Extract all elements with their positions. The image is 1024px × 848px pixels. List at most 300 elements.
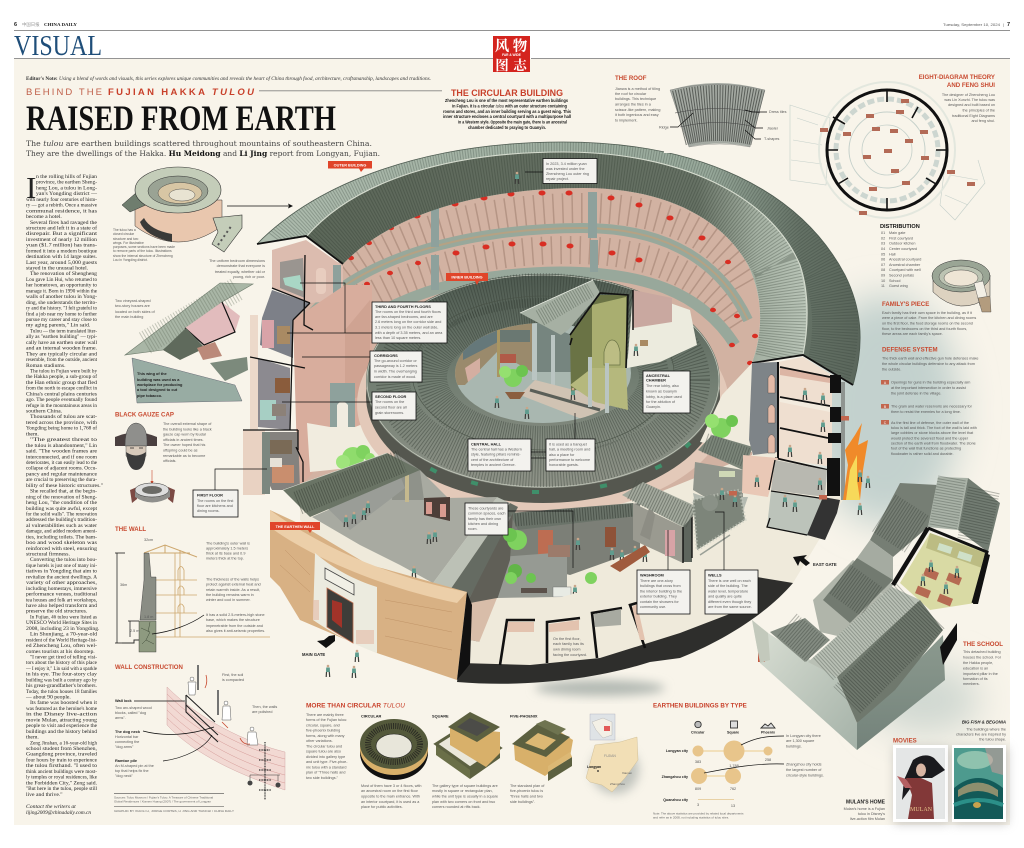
article body: heng Lou, "the condition of the bbox=[26, 499, 97, 506]
note: uniform bedrooms bbox=[209, 259, 266, 279]
text: wall notes: It has a solid 2.5-meters-high stone bbox=[206, 613, 265, 617]
article body: cally have an earthen outer wall bbox=[26, 340, 97, 346]
text: black gauze cap bbox=[163, 422, 212, 463]
callout: courtyards bbox=[465, 503, 508, 535]
illustration: wall construction bbox=[167, 665, 285, 800]
chart: earthen buildings by type: 762 bbox=[730, 787, 736, 791]
text: forms intro bbox=[306, 713, 348, 780]
poster: big fish and begonia bbox=[952, 745, 1008, 824]
callout: wells: different even though they bbox=[708, 600, 751, 604]
callout: assembly hall: It is used as a banquet bbox=[549, 442, 588, 446]
article body: for the solid walls". The renovation bbox=[26, 510, 97, 518]
text: wall notes: protect against external heat and bbox=[206, 582, 261, 586]
upper gallery walls bbox=[293, 188, 760, 500]
credits: GRAPHIC BY XIAOLI LI, JORGE CORTES, LI JING AND TIANCHI / CHINA DAILY bbox=[114, 809, 234, 813]
callout: wells: and quality are quite bbox=[708, 594, 742, 598]
callout: corridors bbox=[370, 351, 422, 382]
article body: building was built a century ago by bbox=[26, 677, 97, 683]
main title: RAISED FROM EARTH bbox=[26, 98, 336, 138]
labels: roof parts bbox=[659, 110, 787, 141]
callout: central hall: cent of the architecture of bbox=[471, 458, 514, 462]
callout: central hall: temples in ancient Greece. bbox=[471, 463, 516, 467]
person on roof with callout: repair project. bbox=[546, 177, 569, 181]
callout: courtyards: common spaces, each bbox=[468, 512, 506, 516]
text: family's piece: floor, to the bedrooms on the third and fourth floors, bbox=[882, 327, 967, 331]
callout: corridors: The go-around corridor or bbox=[374, 359, 417, 363]
callout: ancestral chamber: lobby, is a place used bbox=[646, 395, 682, 399]
notes: construction steps: is compacted bbox=[222, 678, 244, 682]
subtitle: They are the dwellings of the Hakka. Hu Meidong and Li Jing report from Longyan, Fujian. bbox=[26, 149, 380, 158]
left tower rooms bbox=[243, 240, 384, 495]
text: square: corners rounded at rifts back. bbox=[432, 805, 481, 809]
list: distribution: Second portals bbox=[889, 274, 914, 278]
article body: and an internal wooden frame. bbox=[26, 345, 98, 352]
article body: tique hotels is just one of many ini- bbox=[26, 562, 97, 569]
defense item c: C bbox=[884, 421, 887, 425]
callout: washroom: WASHROOM bbox=[640, 572, 664, 578]
list: distribution: Ancestral chamber bbox=[889, 263, 921, 267]
callout: third and fourth floors: 2.6 meters long on the corridor side and bbox=[375, 320, 441, 324]
text: circular building intro: rooms and stores, and an inner building serving as a guest wing. This bbox=[443, 109, 572, 114]
form: five-phoenix: five-phoenix tulou is bbox=[510, 789, 543, 793]
list: distribution: 08 bbox=[881, 268, 885, 272]
article body: ally as "earthen building" — typi- bbox=[26, 334, 97, 340]
chart: earthen buildings by type: circular-style buildings. bbox=[786, 774, 824, 778]
list: distribution: 02 bbox=[881, 236, 885, 240]
article body: said. "The wooden frames are bbox=[26, 448, 97, 455]
defense item c: section of the earth wall from floodwater. The stone bbox=[891, 442, 976, 446]
defense item c: large cobbles or stone blocks above the level that bbox=[891, 431, 974, 435]
article body: structural firmness. bbox=[26, 550, 70, 558]
arrow: cap to ring bbox=[150, 470, 154, 485]
subtitle: The tulou are earthen buildings scattered throughout mountains of southeastern China. bbox=[26, 139, 372, 148]
note: wing workplace bbox=[136, 371, 183, 398]
chart: earthen buildings by type: buildings. bbox=[786, 744, 802, 748]
form: circular: an interior courtyard, it is used as a bbox=[361, 800, 420, 804]
callout: central hall: style, featuring pillars reminis- bbox=[471, 452, 521, 456]
callout: courtyards: room. bbox=[468, 527, 478, 531]
article body: movie Mulan, attracting young bbox=[26, 717, 97, 723]
text: black gauze cap: The overall external shape of bbox=[163, 422, 212, 426]
chart: earthen buildings by type: Note: The above statistics are provided by related local departments bbox=[653, 812, 744, 816]
text: forms intro: nix tulou with a standard bbox=[306, 766, 346, 770]
article body: find a job near my home to further bbox=[26, 310, 97, 317]
callout: washroom bbox=[637, 570, 690, 614]
article body: the Han ethnic group that fled bbox=[26, 379, 97, 386]
inner courtyard bbox=[455, 323, 631, 423]
article body: the tulou is abandonment," Lin bbox=[26, 443, 97, 449]
labels: roof parts: Jiaolei bbox=[767, 126, 778, 130]
kicker bbox=[26, 87, 442, 98]
callout: wells: There is one well on each bbox=[708, 579, 751, 583]
heading: movies: MOVIES bbox=[893, 738, 917, 744]
labels: construction parts: top that helps fix the bbox=[115, 769, 149, 773]
defense item a: at the important intersection in order to assist bbox=[891, 386, 967, 390]
header rule bbox=[14, 57, 1010, 60]
text: mulan's home: tulou in Disney's bbox=[858, 812, 885, 816]
list: distribution: Outdoor kitchen bbox=[889, 242, 915, 246]
text: square bbox=[432, 784, 498, 809]
defense item c bbox=[881, 420, 977, 456]
article body: n the rolling hills of Fujian bbox=[36, 173, 97, 180]
chart: earthen buildings by type: Quanzhou city bbox=[663, 798, 688, 802]
article body: Lou gave Lin Hui, who returned to bbox=[26, 277, 97, 283]
chart: earthen buildings by type bbox=[653, 721, 824, 820]
text: wall notes: impenetrable from the outside and bbox=[206, 624, 263, 628]
page header: 6 bbox=[14, 22, 17, 28]
list: distribution: Courtyard with well bbox=[889, 268, 921, 272]
list: distribution: School bbox=[889, 279, 901, 283]
diagram: wall section bbox=[115, 538, 270, 652]
chart: earthen buildings by type: Zhangzhou city holds bbox=[786, 762, 822, 766]
article body: formed it into a modern boutique bbox=[26, 247, 97, 254]
chart: earthen buildings by type: the largest number of bbox=[786, 768, 822, 772]
chart: earthen buildings by type: Zhangzhou city bbox=[662, 775, 688, 779]
form: circular: opposite to the main entrance. With bbox=[361, 794, 420, 798]
article body: southern China. bbox=[26, 408, 63, 414]
article body: I bbox=[26, 170, 36, 205]
article body: 2008, including 23 in Yongding. bbox=[26, 626, 100, 632]
heading: eight-diagram theory: AND FENG SHUI bbox=[947, 82, 995, 89]
text: black gauze cap: remarkable as to become bbox=[163, 454, 205, 458]
text: the school: This detached building bbox=[963, 650, 1001, 654]
callout: ancestral chamber: Guanyin. bbox=[646, 405, 661, 409]
article body: with nearly four centuries of histo- bbox=[26, 196, 97, 203]
logo: far and wide: FAR & WIDE bbox=[502, 53, 521, 57]
chart: earthen buildings by type: 1,788 bbox=[729, 764, 739, 768]
chart: earthen buildings by type: 258 bbox=[765, 758, 771, 762]
callout: assembly hall: hall, a meeting room and bbox=[549, 448, 590, 452]
text: forms intro: square tulou are also bbox=[306, 750, 341, 754]
right-hand courtyard and small building bbox=[693, 363, 753, 530]
map: fujian: Xiamen bbox=[622, 771, 633, 775]
article body: her hometown, an opportunity to bbox=[26, 283, 97, 289]
article body: walls of another tulou in Yong- bbox=[26, 293, 97, 300]
text: family's piece: Each family has their own space in the building, as if it bbox=[882, 311, 973, 315]
callout: central hall bbox=[468, 439, 531, 471]
article body: China's central plains centuries bbox=[26, 391, 98, 397]
text: family's piece bbox=[882, 311, 976, 336]
note: side houses: the main building bbox=[115, 315, 143, 319]
illustration: left wing bbox=[125, 283, 253, 403]
notes: construction steps: Then, the walls bbox=[252, 705, 277, 709]
article body: The tulou in Fujian were built by bbox=[30, 368, 97, 374]
note: tulou overview: closed circular bbox=[113, 232, 135, 236]
callout: corridors: passageway is 1.2 meters bbox=[374, 364, 417, 368]
text: big fish: the tulou shape. bbox=[979, 738, 1006, 742]
article body: in the Disney live-action bbox=[26, 712, 97, 718]
arrow: main gate bbox=[302, 635, 335, 657]
text: eight-diagram theory: traditional Eight Diagrams bbox=[952, 114, 995, 118]
article body: damage, and added modern ameni- bbox=[26, 529, 97, 535]
callout: corridors: CORRIDORS bbox=[374, 353, 398, 358]
form: five-phoenix: The standard plan of bbox=[510, 784, 545, 788]
text: forms intro: plan of "Three halls and bbox=[306, 771, 345, 775]
note: uniform bedrooms: treated equally, whether old or bbox=[215, 270, 266, 274]
form: five-phoenix: side buildings". bbox=[510, 800, 535, 804]
list: distribution: Ancestral courtyard bbox=[889, 258, 921, 262]
callout: washroom: buildings that cross from bbox=[640, 584, 681, 588]
callout: second floor: second floor are all bbox=[375, 406, 407, 410]
labels: construction parts: Two arc-shaped wood bbox=[115, 706, 152, 710]
article body: — I enjoy it," Lin said with a sparkle bbox=[25, 666, 97, 672]
defense item b bbox=[881, 404, 973, 414]
article body: pancy and regular maintenance bbox=[26, 471, 97, 477]
labels: construction parts: arms". bbox=[115, 716, 126, 720]
note: tulou overview bbox=[113, 228, 175, 262]
label: earthen wall bbox=[270, 522, 320, 533]
text: wall notes: The thickness of the walls helps bbox=[206, 578, 259, 582]
article body: "The greatest threat to bbox=[30, 437, 97, 443]
defense item b: B bbox=[884, 405, 887, 409]
article body: Last year, around 5,000 guests bbox=[26, 260, 98, 266]
arrow: main gate: MAIN GATE bbox=[302, 652, 325, 657]
text: big fish bbox=[956, 720, 1006, 742]
labels: construction parts: The dog neck bbox=[115, 729, 141, 734]
article body: tors about the history of this place bbox=[26, 659, 97, 666]
article body: yan's Yongding district — bbox=[36, 191, 97, 197]
callout: assembly hall: also a place for bbox=[549, 453, 575, 457]
text: forms intro: circular, square, and bbox=[306, 724, 340, 728]
text: forms intro: forms, along with many bbox=[306, 734, 345, 738]
article body: She recalled that, at the begin- bbox=[30, 489, 97, 495]
list: distribution: 07 bbox=[881, 263, 885, 267]
article body: Today, the tulou houses 18 families bbox=[26, 688, 98, 695]
article body: ry and the history. "I felt grateful to bbox=[26, 305, 97, 312]
credits: Sources: Tulou Museum / Fujian's Tulou: A Treasure of Chinese Traditional bbox=[114, 796, 213, 800]
form: five-phoenix bbox=[510, 714, 573, 804]
text: mulan's home: Mulan's home is a Fujian bbox=[844, 807, 885, 811]
people by main gate bbox=[326, 650, 359, 678]
note: first floor dining: On the first floor, bbox=[553, 637, 581, 641]
text: family's piece: on the first floor, the food storage rooms on the second bbox=[882, 322, 973, 326]
arrow: overview to main illustration bbox=[227, 204, 293, 208]
middle court bbox=[467, 503, 757, 665]
callout: second floor: grain storerooms. bbox=[375, 411, 404, 415]
article body: "But here in the tulou, people still bbox=[26, 786, 97, 792]
chart: earthen buildings by type: 13 bbox=[731, 804, 735, 808]
article body: ning of the renovation of Sheng- bbox=[26, 493, 97, 500]
article body: school student from Shenzhen, bbox=[26, 745, 98, 752]
form: five-phoenix: "three halls and two bbox=[510, 794, 543, 798]
text: family's piece: these areas are each family's space. bbox=[882, 332, 943, 336]
text: forms intro: The circular tulou and bbox=[306, 744, 342, 748]
text: the school: the Hakka people, bbox=[963, 661, 993, 665]
editor's note: Editor's Note: Using a blend of words and visuals, this series explores unique communities and reveals the heart of China through food, architecture, craftsmanship, landscapes and traditions. bbox=[26, 75, 431, 82]
person on roof with callout: was invested under the bbox=[546, 167, 585, 171]
note: uniform bedrooms: demonstrate that everyone is bbox=[217, 264, 265, 268]
ancestral chamber cut-away bbox=[627, 290, 697, 368]
heading: circular building: THE CIRCULAR BUILDING bbox=[451, 88, 563, 98]
text: the school: education is an bbox=[963, 666, 988, 670]
callout: second floor: The rooms on the bbox=[375, 400, 404, 404]
text: the roof: scissor-like pattern, making bbox=[615, 108, 660, 112]
article body bbox=[25, 170, 103, 816]
logo: far and wide: 物 bbox=[513, 35, 528, 56]
note: first floor dining: facing the courtyard. bbox=[553, 653, 587, 657]
poster: mulan bbox=[893, 745, 949, 824]
labels: construction parts: Wall lock bbox=[115, 698, 133, 703]
form: circular: CIRCULAR bbox=[361, 714, 382, 718]
article body: resemble, from the outside, ancient bbox=[26, 356, 97, 363]
text: black gauze cap: The owner hoped that his bbox=[163, 443, 205, 447]
text: defense system bbox=[882, 356, 978, 372]
article body: Its fame was boosted when it bbox=[30, 699, 97, 706]
callout: central hall: The central hall has a Western bbox=[471, 448, 522, 452]
article body: four hours by train to experience bbox=[26, 756, 97, 763]
text: black gauze cap: officials in ancient times. bbox=[163, 438, 204, 442]
labels: construction parts: "dog neck" bbox=[115, 774, 134, 778]
article body: them. bbox=[26, 431, 39, 437]
text: wall notes: The building's outer wall is bbox=[206, 542, 250, 546]
heading: the wall: THE WALL bbox=[115, 526, 146, 533]
article body: yuan ($1.7 million) has trans- bbox=[26, 242, 97, 249]
labels: construction parts: connecting the bbox=[115, 740, 139, 744]
chart: earthen buildings by type: 3 bbox=[697, 803, 699, 807]
callout: courtyards: family has their own bbox=[468, 517, 501, 521]
article body: including homestays, immersive bbox=[26, 586, 97, 592]
text: the school: houses the school. For bbox=[963, 656, 1002, 660]
text: forms intro: other variations. bbox=[306, 739, 333, 743]
form: square bbox=[432, 712, 500, 779]
article body: interconnected, and if one room bbox=[26, 453, 98, 460]
text: circular building intro: chamber dedicated to praying to Guanyin. bbox=[468, 125, 546, 130]
list: distribution: 10 bbox=[881, 279, 885, 283]
callout: third and fourth floors: less than 10 square meters. bbox=[375, 336, 421, 340]
text: the school: formation of its bbox=[963, 677, 988, 681]
chart legend: Square bbox=[727, 730, 739, 734]
diagram: wall section: 32cm bbox=[144, 538, 153, 542]
text: square: The gallery type of square buildings are bbox=[432, 784, 498, 788]
defense item b: them to resist the enemies for a long time. bbox=[891, 410, 961, 414]
article body: — about 90 people. bbox=[25, 694, 71, 700]
text: mulan's home bbox=[844, 800, 886, 821]
diagram: wall section: 36m bbox=[120, 583, 127, 587]
ground shadows bbox=[535, 295, 980, 735]
text: the school: important pillar in the bbox=[963, 672, 998, 676]
map: fujian: Longyan bbox=[587, 765, 601, 769]
article body: ago. The people eventually found bbox=[26, 396, 97, 403]
central hall bbox=[520, 280, 628, 413]
note: side houses bbox=[115, 299, 156, 319]
text: forms intro: two side buildings." bbox=[306, 776, 339, 780]
note: tulou overview: to remove parts of the tulou. Illustrations bbox=[113, 249, 172, 253]
text: circular building intro: in Fujian. It is a circular tulou with an outer structure containing bbox=[452, 104, 567, 108]
form: circular: Most of them have 3 or 4 floors, with bbox=[361, 784, 421, 788]
article body: them. bbox=[26, 735, 39, 741]
arrow: east gate bbox=[793, 555, 837, 567]
illustration: family ring bbox=[932, 260, 991, 312]
fire bbox=[843, 423, 870, 515]
text: circular building intro bbox=[443, 98, 572, 130]
heading: the school: THE SCHOOL bbox=[963, 641, 1003, 648]
article body: revitalize the ancient dwellings. A bbox=[26, 574, 98, 580]
callout: wells: side of the building. The bbox=[708, 584, 748, 588]
labels: construction parts: "dog arms" bbox=[115, 745, 134, 749]
note: first floor dining bbox=[553, 637, 587, 657]
labels: roof parts: T-shapes bbox=[764, 137, 780, 141]
callout: wells: WELLS bbox=[708, 572, 722, 578]
icon: small ring bbox=[130, 483, 175, 503]
list: distribution bbox=[881, 231, 921, 288]
page header: | bbox=[1003, 23, 1004, 27]
person on roof with callout: In 2023, 3.4 million yuan bbox=[546, 162, 587, 166]
text: square: while the unit type is usually in a square bbox=[432, 794, 498, 798]
chart: earthen buildings by type: 383 bbox=[695, 760, 701, 764]
inner building bbox=[357, 274, 729, 514]
text: square: plan with two corners on front and two bbox=[432, 800, 495, 804]
heading: eight-diagram theory: EIGHT-DIAGRAM THEORY bbox=[919, 74, 995, 81]
callout: ancestral chamber bbox=[643, 371, 690, 413]
article body: variety of other approaches, bbox=[26, 579, 98, 586]
callout: assembly hall bbox=[546, 439, 595, 471]
list: distribution: Main gate bbox=[889, 231, 905, 235]
article body: pursue my career and stay close to bbox=[26, 317, 97, 323]
map: fujian bbox=[586, 714, 639, 794]
text: wall notes: also gives it anti-seismic properties. bbox=[206, 629, 265, 633]
label: earthen wall: THE EARTHEN WALL bbox=[276, 525, 315, 529]
list: distribution: 04 bbox=[881, 247, 885, 251]
article body: have also helped transform and bbox=[26, 602, 97, 609]
text: the roof bbox=[615, 87, 660, 122]
callout: assembly hall: performance to welcome bbox=[549, 458, 590, 462]
text: the roof: to implement. bbox=[615, 118, 638, 122]
chart legend: Circular bbox=[691, 730, 705, 734]
page header: CHINA DAILY bbox=[44, 22, 78, 27]
form: circular: place for public activities. bbox=[361, 805, 403, 809]
chart: floor plan bbox=[790, 82, 985, 220]
article body: was featured as the heroine's home bbox=[26, 705, 97, 712]
article body: people to visit and experience the bbox=[26, 723, 97, 729]
article body: become a hotel. bbox=[26, 214, 62, 220]
article body: addressed the building's tradition- bbox=[26, 517, 97, 523]
ring tablets bbox=[429, 441, 692, 494]
callout: washroom: There are one-story bbox=[640, 579, 673, 583]
article body: UNESCO World Heritage Sites in bbox=[26, 620, 97, 626]
note: wing workplace: pipe tobacco. bbox=[137, 393, 162, 398]
callout: ancestral chamber: known as Guanyin bbox=[646, 390, 677, 394]
article body: preserve the old structures. bbox=[26, 609, 88, 615]
notes: construction steps: First, the soil bbox=[222, 673, 243, 677]
article body: "I never get tired of telling visi- bbox=[30, 654, 97, 660]
text: black gauze cap: officials. bbox=[163, 459, 176, 463]
article body: his great-grandfather's brothers. bbox=[26, 682, 98, 689]
text: the roof: the roof for circular bbox=[615, 92, 647, 96]
text: defense system: the whole circular buildings defensive to any attack from bbox=[882, 362, 975, 366]
article body: They are typically circular and bbox=[26, 351, 97, 357]
text: square: mostly in square or rectangular plan, bbox=[432, 789, 493, 793]
right tower bbox=[742, 357, 845, 536]
text: eight-diagram theory: The designer of Zhencheng Lou bbox=[942, 93, 995, 97]
article body: think ancient buildings were most- bbox=[26, 769, 97, 775]
poster: mulan: MULAN bbox=[910, 807, 933, 813]
article body: Tulou — the term translated liter- bbox=[30, 328, 97, 334]
callout: third and fourth floors: are fan-shaped bedrooms, and are bbox=[375, 315, 433, 319]
note: side houses: two-story houses are bbox=[115, 304, 150, 308]
text: eight-diagram theory: the principles of the bbox=[962, 108, 995, 112]
text: black gauze cap: the building looks like a black bbox=[163, 427, 212, 431]
defense tags on illustration bbox=[729, 416, 849, 500]
page header: 7 bbox=[1007, 22, 1010, 28]
article body: manage it. Born in 1990 within the bbox=[26, 288, 97, 294]
article body: live and thrive." bbox=[26, 792, 63, 798]
note: wing workplace: building was used as a bbox=[137, 377, 180, 382]
heading: family's piece: FAMILY'S PIECE bbox=[882, 301, 929, 308]
article body: stayed in the unusual hotel. bbox=[26, 266, 89, 272]
label: outer building: OUTER BUILDING bbox=[334, 164, 366, 168]
article body: The renovation of Shengheng bbox=[30, 270, 97, 277]
text: eight-diagram theory: designed and built based on bbox=[948, 103, 995, 107]
